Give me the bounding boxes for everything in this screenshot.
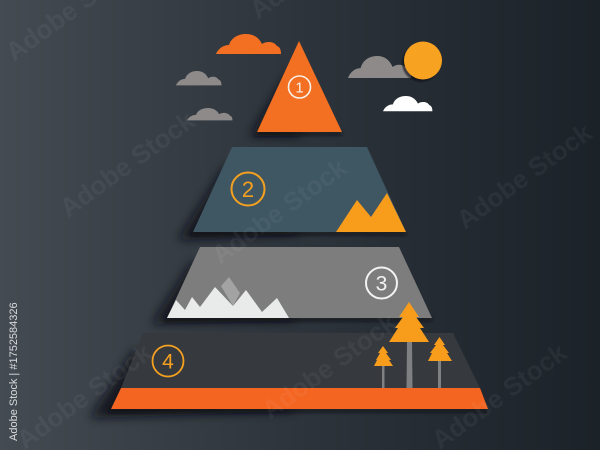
tree: right [428,337,452,388]
tree: large centre [389,302,429,388]
white mountains [167,287,289,318]
tier 2: slate trapezoid [193,147,406,232]
number 2 [232,172,264,206]
contact shadows under tier edges [108,132,488,413]
tier 3: grey trapezoid [167,247,432,318]
watermarks: Adobe Stock [54,105,201,223]
tier 4: dark trapezoid with ground [111,302,488,409]
cloud: orange [216,34,281,54]
cloud: white [383,96,432,111]
back mountain peak [221,277,240,306]
watermarks: Adobe Stock [256,307,403,425]
orange mountains [336,193,406,232]
number 4 [152,346,184,376]
tree: small left [374,346,393,388]
shadows behind pyramid tiers [90,70,300,418]
watermarks: Adobe Stock [206,152,353,270]
sun [404,42,442,80]
stock id caption: Adobe Stock | #1752584326 [8,302,20,441]
number 1: 1 [295,80,304,96]
number 3: 3 [376,272,387,296]
cloud: grey beside sun [348,56,411,78]
number 3 [366,268,397,298]
sun shadow [402,44,440,82]
cloud: grey upper left [176,71,222,85]
number 4: 4 [162,350,174,374]
orange ground band [111,388,488,409]
number 2: 2 [242,177,254,202]
watermarks: Adobe Stock [451,117,598,235]
cloud: grey lower left [187,108,232,120]
tier 1: orange triangle [257,41,342,132]
